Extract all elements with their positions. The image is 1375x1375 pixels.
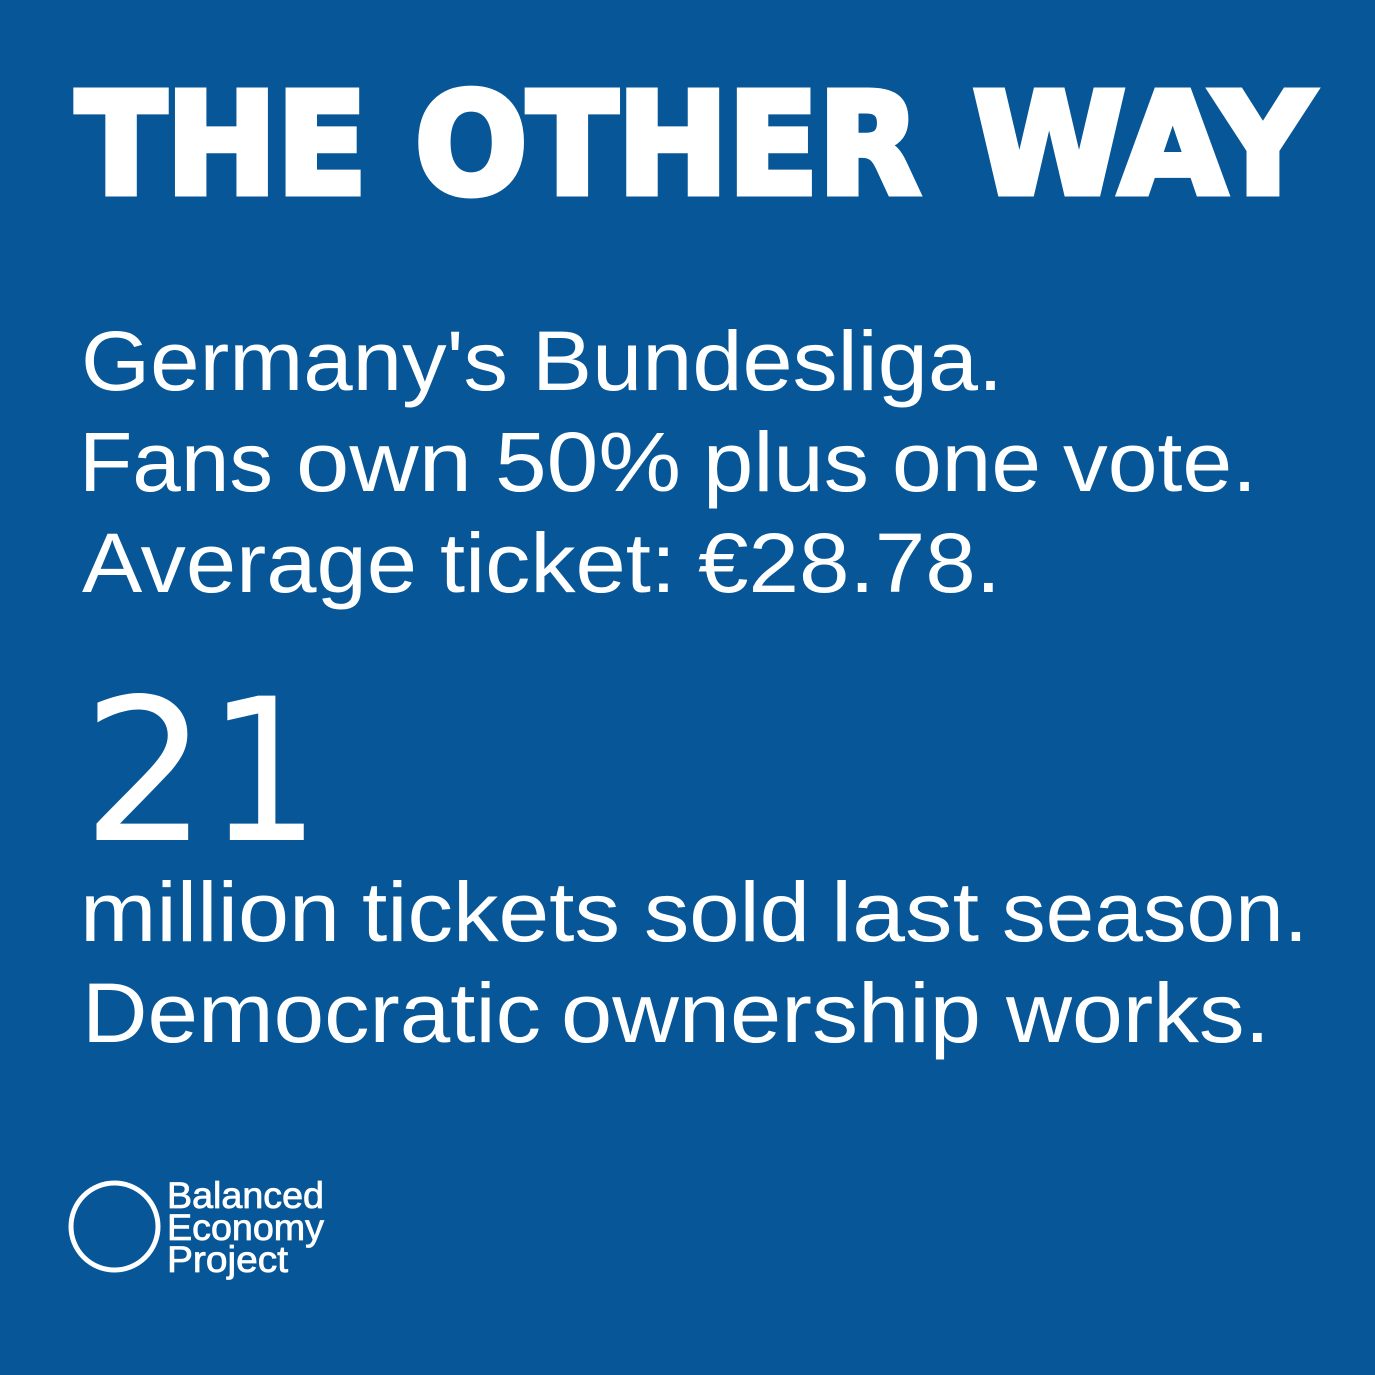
text line: tickets sold: tickets	[362, 865, 620, 959]
text block: tickets and conclusion	[80, 865, 1308, 1060]
big number: 2	[82, 656, 208, 887]
text line: Germany's Bundesliga	[81, 314, 1003, 408]
text line: tickets sold: sold	[644, 865, 810, 959]
logo wordmark: Balanced	[167, 1175, 324, 1216]
text block: Bundesliga facts	[79, 314, 1257, 610]
logo wordmark: Economy	[167, 1207, 325, 1248]
text line: average ticket	[82, 516, 1001, 610]
text line: tickets sold: season.	[1002, 865, 1308, 959]
text line: democratic ownership: Democratic	[82, 966, 541, 1060]
text line: fan ownership: one	[892, 415, 1041, 509]
text line: fan ownership: own	[296, 415, 472, 509]
text line: average ticket: Average	[82, 516, 417, 610]
text line: fan ownership: Fans	[79, 415, 273, 509]
big number: 1	[208, 656, 320, 887]
text line: Germany's Bundesliga: Germany's	[81, 314, 508, 408]
text line: Germany's Bundesliga: Bundesliga.	[532, 314, 1003, 408]
title: THE	[76, 64, 367, 227]
text line: fan ownership: 50%	[495, 415, 681, 509]
text line: tickets sold: million	[80, 865, 340, 959]
text line: democratic ownership	[82, 966, 1270, 1060]
big number	[82, 656, 320, 887]
text line: democratic ownership: works.	[1005, 966, 1270, 1060]
logo: Balanced Economy Project	[71, 1175, 325, 1280]
text line: fan ownership: plus	[703, 415, 869, 509]
title: OTHER	[415, 64, 920, 227]
text line: democratic ownership: ownership	[561, 966, 981, 1060]
text line: fan ownership	[79, 415, 1257, 509]
title	[76, 64, 1315, 227]
text line: tickets sold: last	[831, 865, 979, 959]
icon: logo circle	[71, 1183, 158, 1270]
text line: tickets sold	[80, 865, 1308, 959]
logo wordmark	[167, 1175, 325, 1280]
text line: average ticket: €28.78.	[698, 516, 1001, 610]
title: WAY	[973, 64, 1315, 227]
text line: fan ownership: vote.	[1063, 415, 1257, 509]
logo wordmark: Project	[167, 1239, 289, 1280]
text line: average ticket: ticket:	[440, 516, 676, 610]
